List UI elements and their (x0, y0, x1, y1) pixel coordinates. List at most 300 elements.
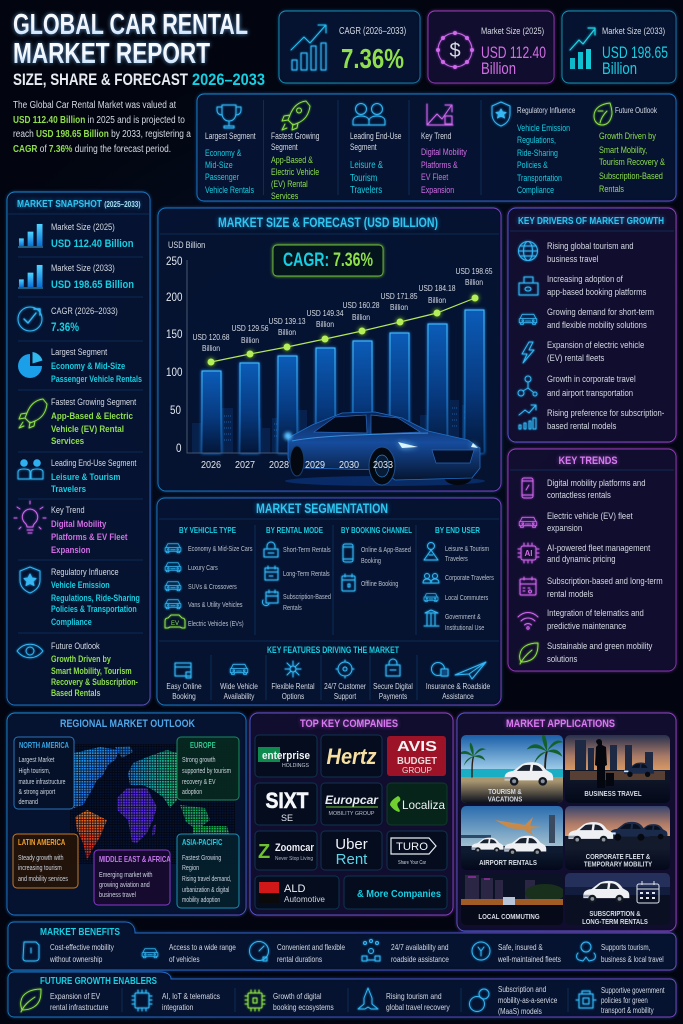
text: Tourism Recovery & (599, 157, 665, 167)
item: future outlook: Future Outlook (51, 641, 101, 651)
item: regulatory influence (20, 567, 140, 627)
benefit: vehicle range: of vehicles (169, 954, 200, 964)
item: key trend: Platforms & EV Fleet (51, 531, 128, 542)
logo: europcar: Europcar (325, 793, 379, 807)
logo: sixt: SE (281, 813, 293, 823)
text: Travelers (350, 184, 383, 195)
axis title: USD Billion (168, 240, 206, 250)
panel: market snapshot (7, 192, 150, 705)
region: north america: NORTH AMERICA (19, 742, 69, 750)
item: market size 2033: USD 198.65 Billion (51, 279, 134, 291)
region: middle east and africa: MIDDLE EAST & AFRICA (99, 855, 171, 864)
item: market size 2025: Market Size (2025) (51, 221, 115, 232)
column: by rental mode: Short-Term Rentals (283, 546, 331, 554)
enabler: digital booking: Growth of digital (273, 991, 322, 1001)
item: largest segment: Economy & Mid-Size (51, 360, 126, 371)
feature: secure payments (373, 659, 413, 701)
icon: dollar coin (436, 32, 474, 68)
enabler: MaaS: mobility-as-a-service (498, 995, 557, 1005)
feature: vehicle availability: Wide Vehicle (220, 681, 258, 691)
icon: trend chart (427, 104, 453, 125)
region: middle east and africa: business travel (99, 891, 136, 899)
title (13, 9, 265, 89)
item: future outlook: Recovery & Subscription- (51, 677, 138, 687)
trend: EV fleet: expansion (547, 522, 582, 533)
item: future outlook (17, 641, 138, 698)
feature: vehicle availability (220, 664, 258, 701)
heading: MARKET SEGMENTATION (256, 501, 388, 516)
region: latin america: Steady growth with (18, 854, 64, 862)
trend: green mobility (520, 640, 653, 664)
logo: avis budget group: GROUP (402, 765, 432, 775)
driver: subscription: Rising preference for subscription- (547, 407, 664, 418)
benefit: safe fleets: well-maintained fleets (497, 954, 561, 964)
feature: vehicle availability: Availability (224, 691, 255, 701)
benefit: cost effective (23, 942, 114, 964)
benefit: availability: roadside assistance (391, 954, 449, 964)
heading: REGIONAL MARKET OUTLOOK (60, 718, 195, 730)
highlight: fastest growing (271, 101, 320, 201)
feature: secure payments: Payments (379, 691, 407, 701)
column: by end user: Local Commuters (445, 594, 489, 602)
logo: turo: TURO (396, 841, 428, 853)
heading: MARKET BENEFITS (40, 926, 120, 938)
region: europe: recovery & EV (182, 778, 216, 786)
column: by end user: BY END USER (435, 525, 480, 535)
driver: EV: Expansion of electric vehicle (547, 339, 644, 350)
enabler: government policies: transport & mobility (601, 1007, 654, 1015)
item: regulatory influence: Compliance (51, 617, 92, 627)
text: EV Fleet (421, 172, 449, 182)
enabler: government policies (576, 987, 665, 1015)
photo tile: corporate fleet (565, 806, 670, 870)
benefit: rental durations: Convenient and flexible (277, 942, 345, 952)
column: by end user: Corporate Travelers (445, 574, 494, 582)
data labels: Billion (352, 312, 370, 322)
item: key trend: Expansion (51, 544, 90, 555)
photo tile: airport (461, 806, 563, 870)
driver: tourism: Rising global tourism and (547, 240, 634, 251)
text: Digital Mobility (421, 147, 468, 157)
label: CAGR (2026–2033) (339, 25, 406, 36)
feature: insurance and roadside: Assistance (442, 691, 474, 701)
trend: AI fleet: and dynamic pricing (547, 553, 616, 564)
trend: subscription: rental models (547, 588, 593, 599)
data labels: Billion (316, 319, 334, 329)
region: middle east and africa (94, 850, 171, 905)
driver: app booking: app-based booking platforms (547, 286, 646, 297)
benefit: safe fleets (472, 942, 561, 964)
logo: zoomcar: Z (258, 841, 270, 863)
icon: shield star (492, 102, 510, 126)
data labels: USD 120.68 (192, 332, 230, 342)
overview text: CAGR of 7.36% during the forecast period. (13, 143, 171, 155)
benefit: vehicle range (142, 942, 236, 964)
text: Economy & (205, 148, 242, 158)
enabler: AI IoT: AI, IoT & telematics (162, 991, 220, 1001)
trend: telematics: Integration of telematics and (547, 607, 644, 618)
item: key trend: Digital Mobility (51, 518, 106, 529)
driver: tourism (518, 240, 634, 264)
text (517, 105, 575, 195)
column: by booking channel (341, 525, 412, 591)
trend: subscription (520, 575, 663, 599)
logo: enterprise: HOLDINGS (282, 763, 310, 769)
x axis labels: 2027 (235, 459, 255, 471)
region: middle east and africa: growing aviation and (99, 881, 150, 889)
item: regulatory influence: Regulations, Ride-Sharing (51, 593, 140, 603)
enabler: digital booking: booking ecosystems (273, 1002, 334, 1012)
logo: zoomcar: Never Stop Living (275, 856, 313, 862)
logo: europcar (321, 783, 382, 825)
kpi card: market size 2033 (562, 11, 676, 83)
feature: secure payments: Secure Digital (373, 681, 413, 691)
logo: localiza: Localiza (402, 798, 445, 812)
driver: EV (522, 339, 644, 363)
enabler: digital booking (245, 990, 334, 1012)
title: SIZE, SHARE & FORECAST (13, 70, 188, 89)
driver: flexible mobility: Growing demand for short-term (547, 306, 654, 317)
item: CAGR: 7.36% (51, 321, 79, 334)
trend: telematics (518, 607, 644, 631)
text: Electric Vehicle (271, 167, 320, 177)
highlight: future outlook (594, 103, 665, 194)
enabler: EV infrastructure: rental infrastructure (50, 1002, 108, 1012)
driver: EV: (EV) rental fleets (547, 352, 604, 363)
column: by booking channel: BY BOOKING CHANNEL (341, 525, 412, 535)
title: 2026–2033 (192, 70, 265, 89)
trend: digital platforms: contactless rentals (547, 489, 611, 500)
value (481, 43, 546, 78)
text: App-Based & (271, 155, 313, 165)
driver: corporate travel (518, 373, 636, 398)
axis ticks: 250 (166, 255, 182, 268)
panel: key drivers (508, 208, 676, 442)
item: market size 2025 (18, 221, 133, 250)
data labels: USD 160.28 (342, 300, 380, 310)
CAGR badge: CAGR: 7.36% (283, 250, 373, 271)
axis ticks (166, 255, 182, 455)
column: by booking channel: Booking (361, 557, 381, 565)
logo: avis budget group: BUDGET (397, 755, 438, 767)
text (350, 131, 402, 195)
enabler: travel recovery: Rising tourism and (386, 991, 442, 1001)
enabler: government policies: policies for green (601, 997, 648, 1005)
text: Platforms & (421, 160, 458, 170)
data labels (192, 266, 493, 353)
region: europe: EUROPE (190, 741, 216, 750)
item: future outlook: Based Rentals (51, 688, 101, 698)
region: asia-pacific: Fastest Growing (182, 854, 222, 862)
text (205, 131, 256, 195)
photo tile: tourism (458, 733, 563, 804)
item: leading end-use (18, 458, 137, 494)
column: by end user (423, 525, 494, 632)
text: Mid-Size (205, 160, 233, 170)
data labels: Billion (465, 277, 483, 287)
axis ticks: 150 (166, 328, 182, 341)
region: asia-pacific: mobility adoption (182, 896, 221, 904)
heading: TOP KEY COMPANIES (300, 718, 398, 730)
value: Billion (602, 59, 637, 78)
text: Segment (350, 142, 377, 152)
x axis labels: 2026 (201, 459, 222, 471)
region: north america: & strong airport (18, 788, 55, 796)
panel: market segmentation (157, 498, 501, 705)
benefit: vehicle range: Access to a wide range (169, 942, 236, 952)
photo tile: subscription: SUBSCRIPTION & (589, 910, 641, 918)
trend: subscription: Subscription-based and long-term (547, 575, 663, 586)
item: regulatory influence: Regulatory Influence (51, 567, 119, 577)
region: europe: Strong growth (182, 756, 216, 764)
photo tile: tourism: VACATIONS (488, 796, 523, 804)
panel: key trends (508, 449, 676, 671)
logo: ald automotive: ALD (284, 883, 305, 895)
title: MARKET REPORT (13, 38, 210, 70)
overview text: reach USD 198.65 Billion by 2033, registering a (13, 128, 191, 140)
value (602, 43, 668, 78)
world map (70, 744, 235, 864)
feature: insurance and roadside: Insurance & Roadside (426, 681, 490, 691)
text: Key Trend (421, 131, 451, 141)
region: asia-pacific (177, 834, 239, 908)
region: north america: mature infrastructure (18, 778, 66, 786)
value: 7.36% (341, 43, 404, 74)
photo tile: local commuting: LOCAL COMMUTING (478, 914, 540, 921)
item: fastest growing: Services (51, 435, 84, 446)
enabler: travel recovery (358, 988, 450, 1012)
enabler: AI IoT: integration (162, 1002, 193, 1012)
x axis labels: 2033 (373, 459, 394, 471)
benefit: cost effective: without ownership (49, 954, 102, 964)
logo: ald automotive (255, 876, 339, 909)
x axis labels (201, 459, 394, 471)
text: Regulatory Influence (517, 105, 575, 115)
x axis labels: 2029 (305, 459, 325, 471)
feature: flexible options: Options (282, 691, 304, 701)
text: Services (271, 191, 298, 201)
item: market size 2025: USD 112.40 Billion (51, 238, 133, 250)
item: fastest growing: Vehicle (EV) Rental (51, 423, 124, 434)
CAGR badge (273, 245, 383, 276)
logo: sixt: SIXT (266, 788, 309, 813)
column: by vehicle type: Electric Vehicles (EVs) (188, 620, 244, 628)
value: USD 112.40 (481, 43, 546, 62)
logo: uber rent (321, 831, 382, 870)
driver: app booking (519, 273, 646, 297)
text: Rentals (599, 184, 624, 194)
region: asia-pacific: Rising travel demand, (182, 875, 231, 883)
panel: highlights (197, 94, 676, 201)
item: fastest growing: App-Based & Electric (51, 410, 133, 421)
benefit: rental durations: rental durations (277, 954, 322, 964)
driver: corporate travel: Growth in corporate travel (547, 373, 636, 384)
feature: customer support: Support (334, 691, 357, 701)
driver: subscription (519, 405, 664, 431)
highlight: regulatory influence (492, 102, 575, 195)
region: asia-pacific: urbanization & digital (182, 886, 229, 894)
logo: uber rent: Rent (336, 851, 368, 868)
region: latin america: increasing tourism (18, 864, 62, 872)
data labels: USD 129.56 (231, 323, 269, 333)
icon: leaf gear (594, 103, 612, 125)
photo tile: business travel: BUSINESS TRAVEL (584, 791, 642, 798)
trend: digital platforms (522, 477, 646, 500)
panel: regional market outlook (7, 713, 246, 915)
column: by vehicle type: Vans & Utility Vehicles (188, 601, 243, 609)
item: largest segment: Passenger Vehicle Rentals (51, 374, 142, 384)
photo tile: subscription (565, 873, 670, 926)
heading: MARKET SIZE & FORECAST (USD BILLION) (218, 215, 438, 230)
bar chart (202, 310, 484, 453)
trend: EV fleet: Electric vehicle (EV) fleet (547, 510, 633, 521)
panel: market benefits (8, 922, 676, 970)
text: Growth Driven by (599, 131, 657, 141)
logo: localiza (387, 783, 447, 825)
benefit: supports tourism: business & local travel (601, 954, 664, 964)
column: by end user: Institutional Use (445, 624, 485, 632)
y axis (166, 240, 287, 455)
text: Leading End-Use (350, 131, 402, 141)
highlight: largest segment (205, 105, 256, 195)
item: fastest growing: Fastest Growing Segment (51, 397, 137, 407)
data labels: Billion (428, 295, 446, 305)
logo: avis budget group: AVIS (397, 738, 437, 755)
axis ticks: 0 (176, 442, 181, 455)
x axis labels: 2030 (339, 459, 360, 471)
text: Leisure & (350, 159, 383, 170)
sub heading: key features: KEY FEATURES DRIVING THE MARKET (267, 645, 399, 655)
item: key trend (14, 501, 128, 555)
heading: FUTURE GROWTH ENABLERS (40, 975, 157, 987)
item: leading end-use: Travelers (51, 483, 86, 494)
x axis labels: 2028 (269, 459, 290, 471)
enabler: MaaS (470, 984, 557, 1016)
column: by rental mode (262, 525, 331, 612)
trend: digital platforms: Digital mobility platforms and (547, 477, 646, 488)
more companies tile (344, 876, 447, 909)
photo tile: local commuting (461, 873, 565, 925)
column: by end user: Travelers (445, 555, 468, 563)
region: europe: supported by tourism (182, 767, 231, 775)
column: by vehicle type: BY VEHICLE TYPE (179, 525, 236, 535)
item: market size 2033 (18, 262, 134, 291)
feature: customer support: 24/7 Customer (324, 681, 366, 691)
text: Smart Mobility, (599, 145, 647, 155)
item: future outlook: Smart Mobility, Tourism (51, 666, 132, 676)
text: Future Outlook (615, 105, 657, 115)
kpi card: market size 2025 (428, 11, 554, 83)
enabler: travel recovery: global travel recovery (386, 1002, 450, 1012)
axis ticks: 100 (166, 366, 182, 379)
panel: market applications (457, 713, 676, 931)
feature: customer support (324, 660, 366, 701)
icon: trophy (217, 105, 241, 128)
photo tile: corporate fleet: TEMPORARY MOBILITY (584, 861, 653, 869)
benefit: availability (362, 940, 449, 964)
column: by vehicle type: Economy & Mid-Size Cars (188, 545, 253, 553)
item: market size 2033: Market Size (2033) (51, 262, 115, 273)
text: Subscription-Based (599, 171, 663, 181)
text: Vehicle Rentals (205, 185, 254, 195)
logo: turo: Share Your Car (398, 860, 426, 866)
highlight: key trend (421, 104, 468, 195)
kpi card: CAGR (279, 11, 420, 83)
icon: people (353, 104, 385, 125)
enabler: government policies: Supportive government (601, 987, 665, 995)
highlight: leading end-use (350, 104, 402, 195)
icon: bars with arrow (570, 28, 595, 69)
column: by vehicle type: SUVs & Crossovers (188, 583, 237, 591)
label: Market Size (2033) (602, 25, 665, 36)
item: leading end-use: Leisure & Tourism (51, 471, 121, 482)
text (599, 105, 665, 194)
item: future outlook: Growth Driven by (51, 654, 111, 664)
data labels: USD 184.18 (418, 283, 456, 293)
axis ticks: 50 (170, 404, 181, 417)
item: CAGR: CAGR (2026–2033) (51, 305, 118, 316)
logo: sixt (255, 783, 317, 825)
panel: market size and forecast chart (158, 208, 501, 491)
enabler: MaaS: Subscription and (498, 984, 546, 994)
column: by vehicle type: Luxury Cars (188, 564, 218, 572)
region: asia-pacific: Region (182, 864, 199, 872)
heading: MARKET APPLICATIONS (506, 718, 615, 730)
feature: flexible options (271, 661, 315, 701)
trend line (208, 294, 478, 366)
region: north america: demand (18, 798, 38, 806)
text: Regulations, (517, 135, 556, 145)
data labels: USD 198.65 (455, 266, 493, 276)
column: by booking channel: Offline Booking (361, 580, 399, 588)
text (271, 131, 320, 201)
enabler: MaaS: (MaaS) models (498, 1006, 542, 1016)
logo: zoomcar (255, 831, 317, 870)
region: middle east and africa: Emerging market with (99, 871, 153, 879)
value: Billion (481, 59, 516, 78)
trend: AI fleet (518, 542, 651, 564)
overview text: USD 112.40 Billion in 2025 and is projected to (13, 114, 185, 126)
trend: AI fleet: AI (524, 549, 532, 558)
trend: telematics: predictive maintenance (547, 620, 626, 631)
more companies tile: & More Companies (357, 888, 441, 900)
panel: future growth enablers (8, 972, 676, 1017)
item: largest segment: Largest Segment (51, 347, 108, 357)
text: Transportation (517, 173, 562, 183)
panel: top key companies (250, 713, 453, 915)
benefit: rental durations (250, 942, 345, 964)
text: Vehicle Emission (517, 123, 570, 133)
benefit: cost effective: Cost-effective mobility (50, 942, 114, 952)
feature: online booking: Easy Online (166, 681, 202, 691)
benefit: supports tourism: Supports tourism, (601, 942, 650, 952)
heading: KEY TRENDS (558, 455, 618, 467)
logo: ald automotive: Automotive (284, 894, 325, 904)
logo: avis budget group (387, 736, 446, 776)
photo tile: tourism: TOURISM & (488, 788, 522, 796)
enabler: EV infrastructure (21, 989, 108, 1012)
text: Largest Segment (205, 131, 256, 141)
data labels: USD 139.13 (268, 316, 306, 326)
region: north america: Largest Market (18, 756, 55, 764)
driver: app booking: Increasing adoption of (547, 273, 623, 284)
overview text: The Global Car Rental Market was valued at (13, 99, 176, 111)
trend: green mobility: solutions (547, 653, 577, 664)
item: leading end-use: Leading End-Use Segment (51, 458, 137, 468)
column: by rental mode: Subscription-Based (283, 593, 331, 601)
item: regulatory influence: Policies & Transportation (51, 604, 137, 614)
text: Compliance (517, 185, 554, 195)
